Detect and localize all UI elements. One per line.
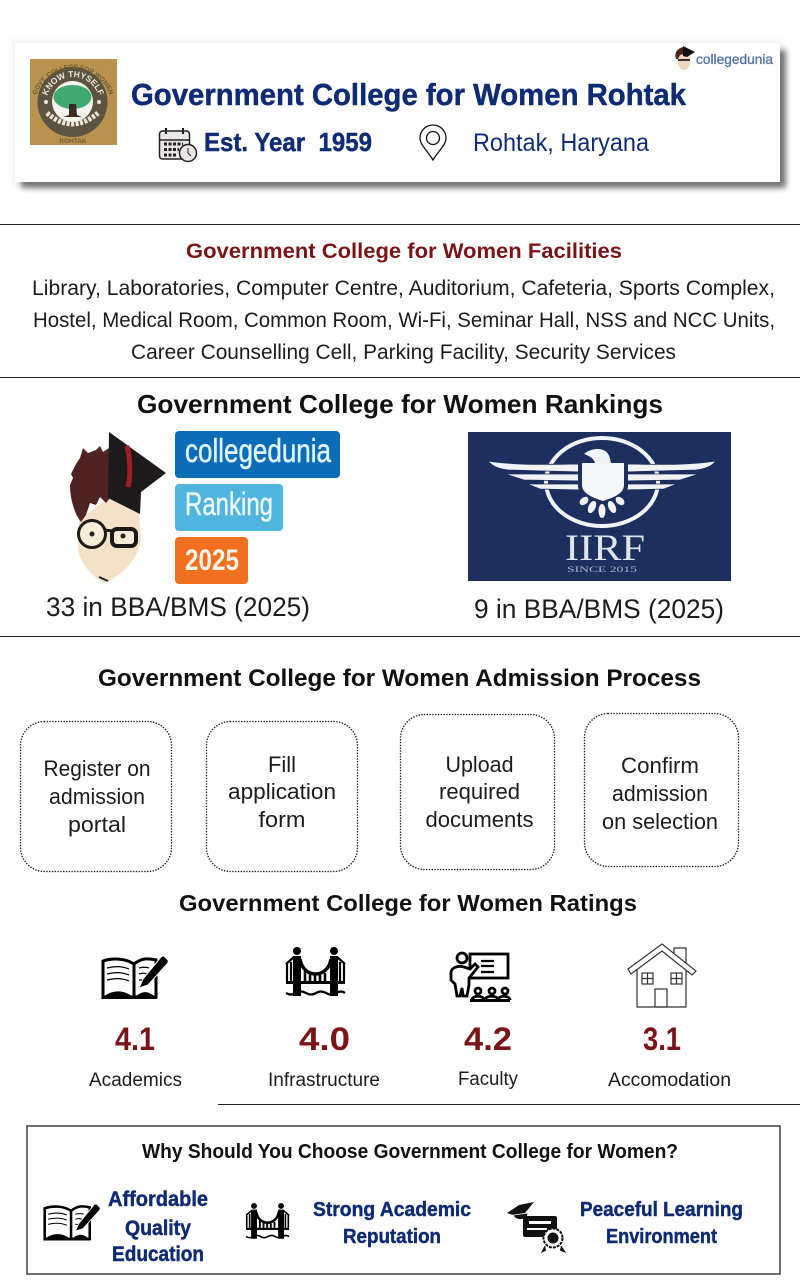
icon: book and pencil small [43, 1204, 100, 1241]
icon: IIRF logo [468, 432, 731, 581]
IIRF rank: 9 in BBA/BMS (2025) [474, 594, 724, 624]
icon: teacher with students [451, 953, 510, 1000]
rating: academics: 4.1 [115, 1021, 155, 1057]
rating: academics: Academics [89, 1070, 182, 1091]
icon: graduation cap and certificate [507, 1202, 565, 1252]
reason 2: Reputation [343, 1226, 441, 1248]
icon: house [628, 944, 696, 1007]
reason 3: Environment [606, 1226, 717, 1248]
panel: header card [13, 41, 790, 192]
icon: college logo [30, 59, 117, 145]
icon: calendar and clock [160, 128, 196, 162]
icon: college logo: KNOW THYSELF [42, 71, 104, 96]
rankings heading: Government College for Women Rankings [137, 389, 663, 419]
reason 3 [580, 1199, 743, 1248]
reason 1 [108, 1188, 208, 1266]
ratings heading: Government College for Women Ratings [179, 890, 637, 916]
admission heading: Government College for Women Admission Process [98, 665, 701, 692]
panel: facilities [32, 240, 775, 364]
panel: rankings [46, 389, 731, 624]
collegedunia rank: 33 in BBA/BMS (2025) [46, 592, 310, 622]
panel: ratings [89, 890, 731, 1091]
divider line [0, 224, 800, 1104]
step 3: documents [426, 807, 534, 832]
icon: book and pencil [101, 956, 168, 999]
step 1 [20, 722, 172, 872]
step 3: Upload [446, 752, 514, 777]
facilities list: Hostel, Medical Room, Common Room, Wi-Fi, Seminar Hall, NSS and NCC Units, [33, 308, 775, 332]
rating: infrastructure: Infrastructure [268, 1070, 380, 1091]
facilities heading: Government College for Women Facilities [186, 240, 622, 263]
rating: accommodation: 3.1 [643, 1021, 681, 1057]
step 4: on selection [602, 809, 718, 834]
step 4: admission [612, 781, 708, 806]
established year: Est. Year 1959 [204, 127, 372, 157]
icon: small mascot logo [675, 46, 695, 70]
step 3 [400, 714, 554, 870]
step 1: admission [49, 784, 145, 809]
step 2 [206, 722, 358, 872]
icon: college logo: ROHTAK [59, 138, 87, 145]
badge: collegedunia [175, 431, 340, 478]
icon: college logo: GOVT. COLLEGE FOR WOMEN [32, 64, 114, 94]
step 2: application [228, 779, 336, 804]
small brand name: collegedunia [696, 51, 773, 67]
badge: ranking [175, 484, 283, 531]
reason 1: Quality [125, 1217, 191, 1240]
rating: faculty [458, 1021, 518, 1090]
step 2: Fill [268, 752, 296, 777]
facilities list: Library, Laboratories, Computer Centre, Auditorium, Cafeteria, Sports Complex, [32, 276, 775, 300]
badge: ranking: Ranking [185, 486, 273, 522]
icon: location pin [420, 125, 446, 160]
icon: IIRF logo: IIRF [565, 528, 645, 569]
location: Rohtak, Haryana [473, 129, 649, 157]
badge: 2025 [175, 537, 248, 584]
panel: admission process [20, 665, 738, 872]
step 1: portal [68, 812, 126, 837]
reason 1: Education [112, 1243, 204, 1266]
title: Government College for Women Rohtak [131, 77, 687, 112]
reason 1: Affordable [108, 1188, 208, 1211]
icon: IIRF logo: SINCE 2015 [567, 565, 637, 574]
rating: academics [89, 1021, 182, 1091]
step 3: required [439, 779, 520, 804]
facilities list [32, 276, 775, 364]
rating: accommodation [608, 1021, 731, 1091]
why choose heading: Why Should You Choose Government College for Women? [142, 1141, 678, 1163]
reason 3: Peaceful Learning [580, 1199, 743, 1221]
rating: infrastructure: 4.0 [299, 1021, 350, 1057]
reason 2 [313, 1199, 471, 1248]
rating: faculty: Faculty [458, 1069, 518, 1090]
rating: infrastructure [268, 1021, 380, 1091]
reason 2: Strong Academic [313, 1199, 471, 1221]
step 1: Register on [44, 756, 150, 781]
rating: accommodation: Accomodation [608, 1070, 731, 1091]
step 4 [584, 714, 738, 866]
rating: faculty: 4.2 [464, 1021, 512, 1057]
badge: 2025: 2025 [185, 544, 239, 577]
icon: collegedunia mascot [70, 432, 166, 583]
icon: suspension bridge [286, 947, 345, 996]
step 2: form [258, 807, 306, 832]
facilities list: Career Counselling Cell, Parking Facility, Security Services [131, 340, 676, 364]
badge: collegedunia: collegedunia [185, 432, 332, 469]
step 4: Confirm [621, 753, 699, 778]
panel: why choose [27, 1126, 780, 1274]
icon: bridge small [246, 1203, 289, 1239]
